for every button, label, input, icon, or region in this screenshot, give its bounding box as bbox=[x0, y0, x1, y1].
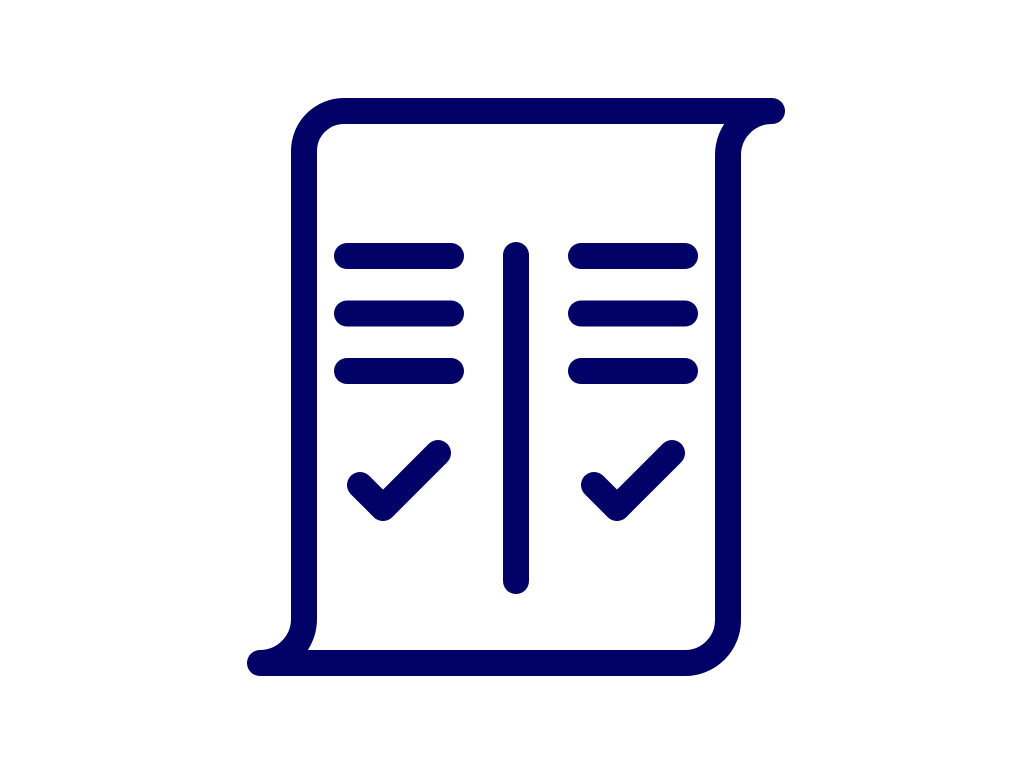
right checkmark bbox=[594, 453, 672, 508]
left column text lines bbox=[347, 256, 451, 371]
left checkmark bbox=[360, 453, 438, 508]
scroll outline bbox=[260, 111, 772, 663]
right column text lines bbox=[581, 256, 685, 371]
centre divider bbox=[503, 255, 529, 581]
